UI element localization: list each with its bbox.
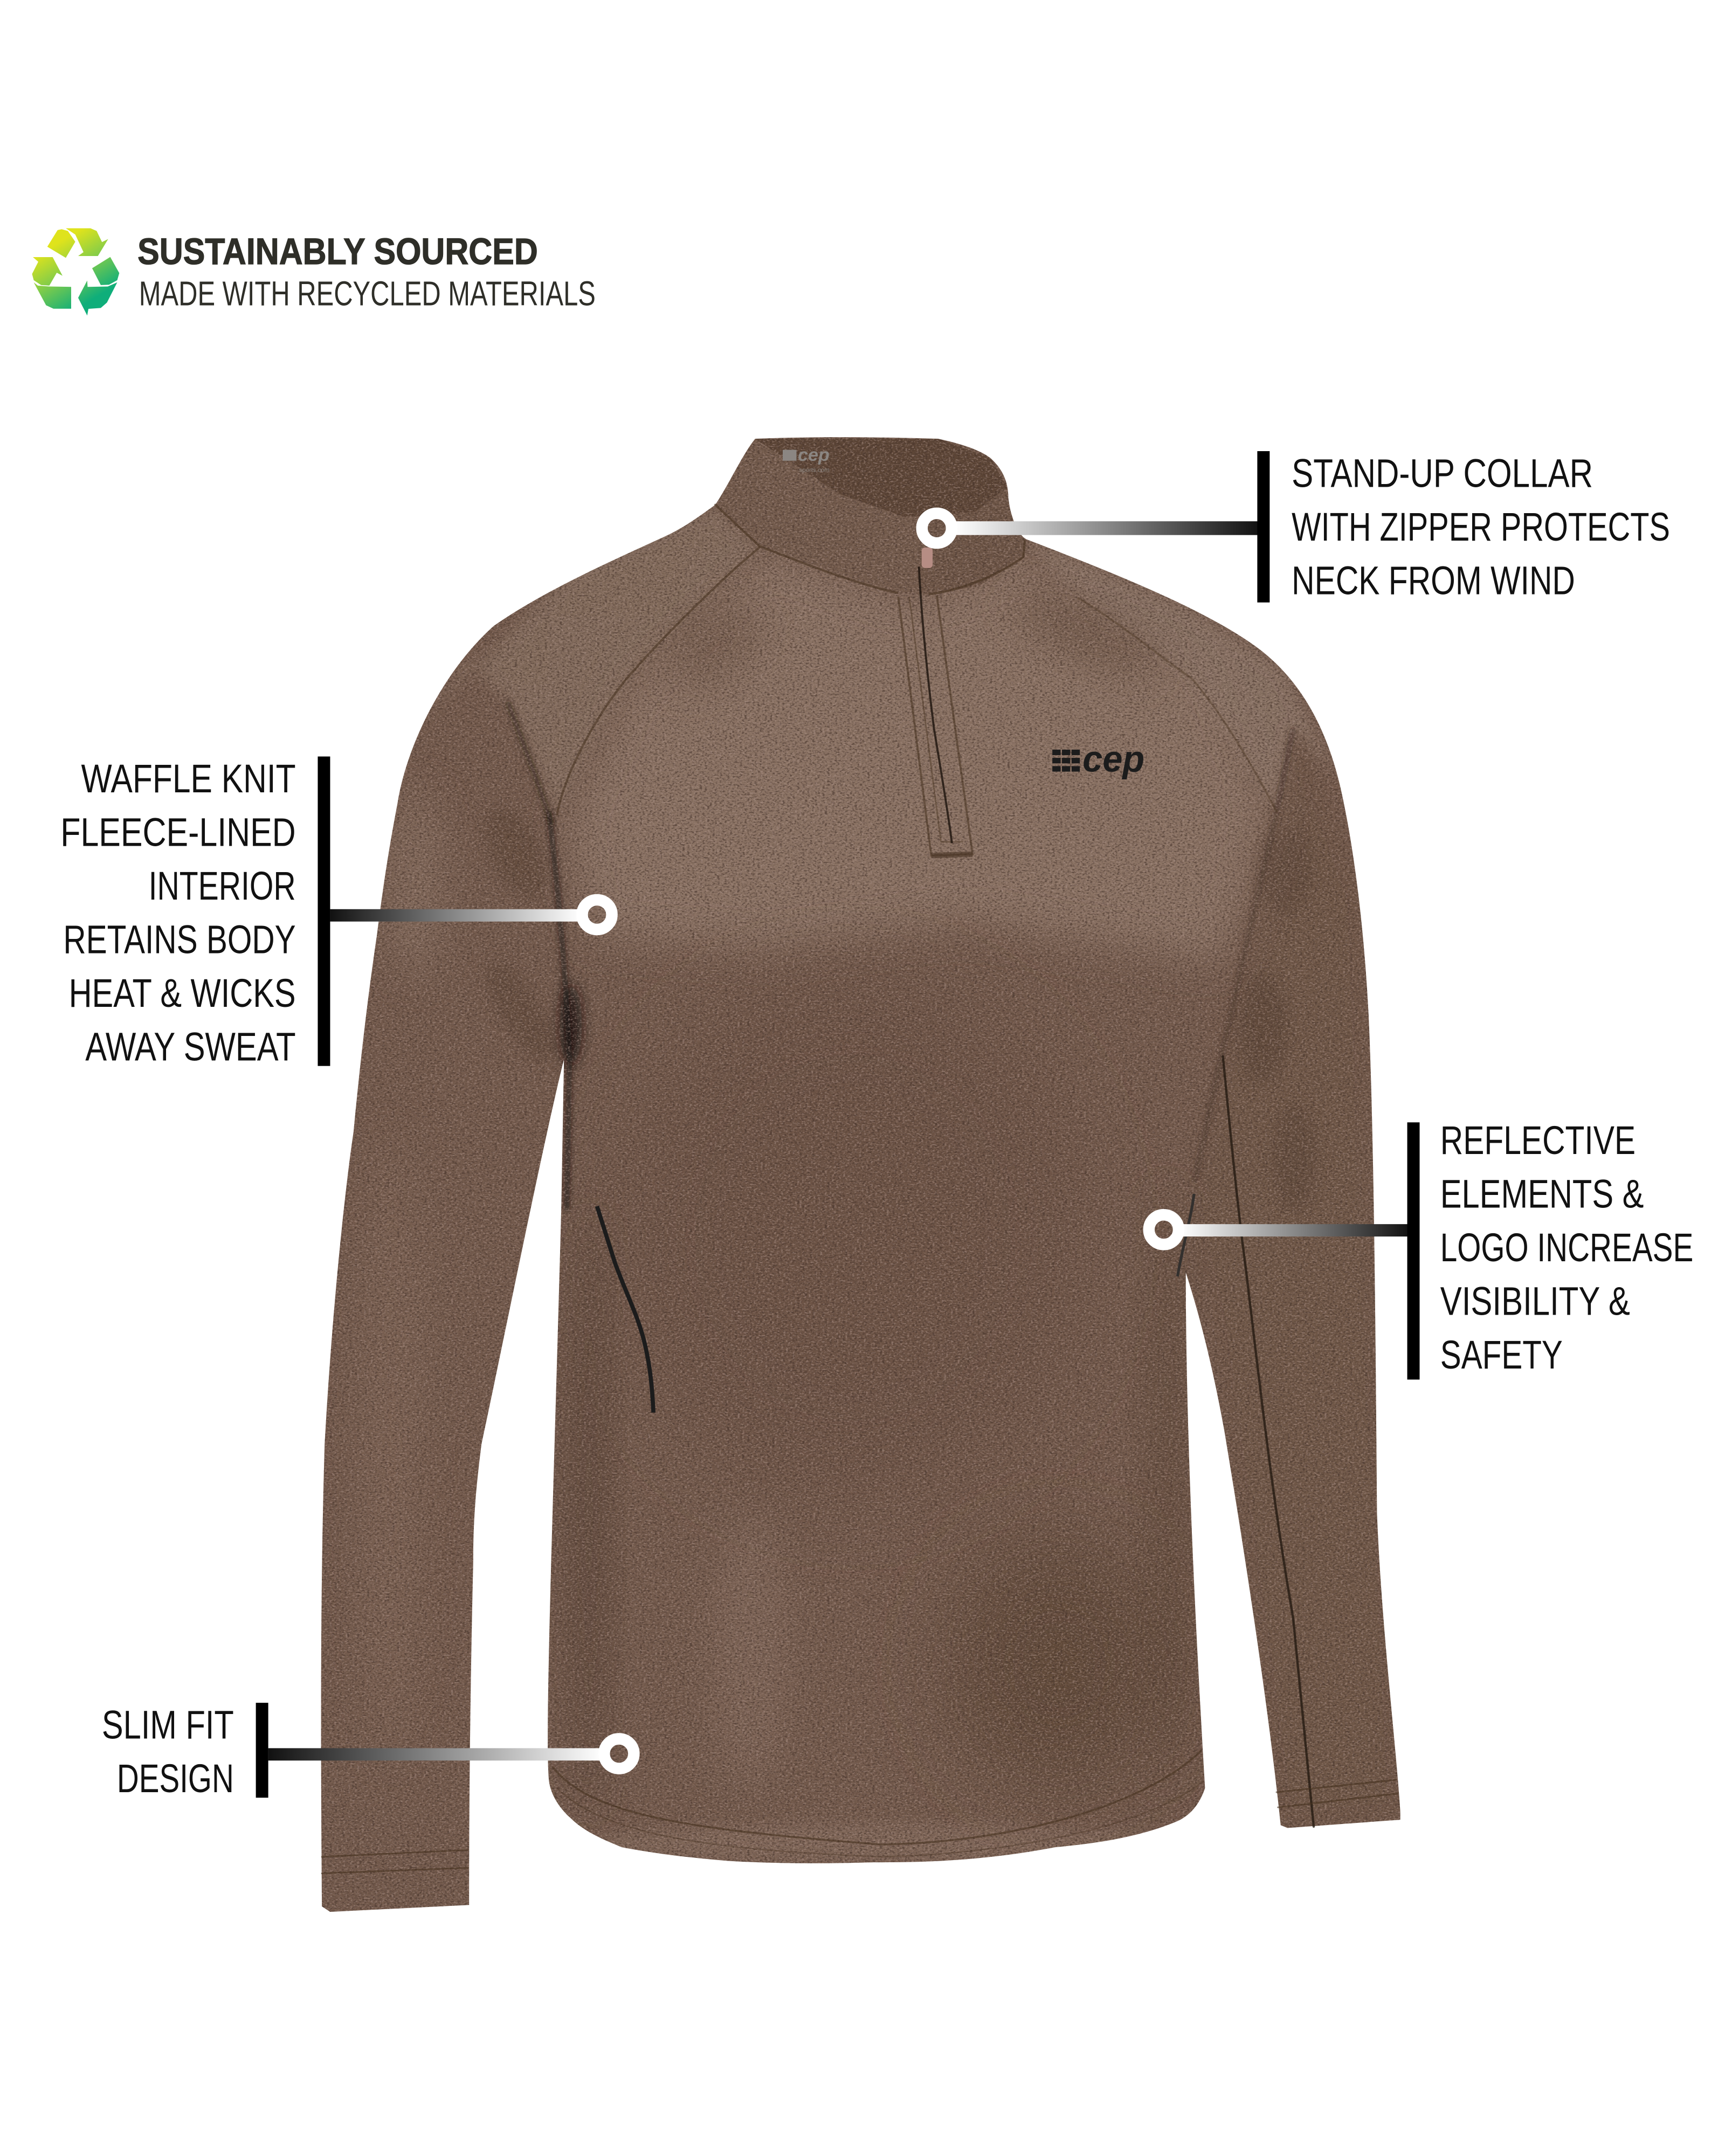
neck label logo: sports.com <box>799 467 830 473</box>
callout: slim fit design: DESIGN <box>117 1756 234 1801</box>
callout: slim fit design <box>102 1703 634 1801</box>
heading: sustainably sourced <box>137 231 596 313</box>
chest logo: cep <box>1082 738 1144 780</box>
callout: waffle knit fleece: FLEECE-LINED <box>60 810 296 854</box>
callout: waffle knit fleece <box>60 756 612 1069</box>
icon: recycling symbol <box>32 229 119 315</box>
callout: waffle knit fleece: HEAT & WICKS <box>69 971 296 1015</box>
soft shading on the garment <box>359 505 1403 1862</box>
callout: reflective elements: VISIBILITY & <box>1440 1279 1630 1324</box>
product photo: brown quarter-zip pullover <box>302 426 1417 1926</box>
reflective pocket line <box>597 1206 653 1413</box>
neck label logo <box>783 445 830 473</box>
chest logo <box>1052 738 1144 780</box>
callout: reflective elements: ELEMENTS & <box>1440 1172 1644 1217</box>
neck label logo: cep <box>798 445 830 465</box>
callout: stand-up collar: NECK FROM WIND <box>1292 558 1575 603</box>
callout: stand-up collar: STAND-UP COLLAR <box>1292 451 1593 495</box>
zipper placket <box>898 566 972 855</box>
collar front <box>715 439 1025 594</box>
callout: waffle knit fleece: WAFFLE KNIT <box>81 756 296 801</box>
callout: reflective elements: SAFETY <box>1440 1332 1563 1377</box>
heading: sustainably sourced: SUSTAINABLY SOURCED <box>137 231 538 272</box>
callout: waffle knit fleece: INTERIOR <box>149 863 296 908</box>
callout: slim fit design: SLIM FIT <box>102 1703 234 1747</box>
callout: waffle knit fleece: AWAY SWEAT <box>85 1024 296 1069</box>
heather fabric texture <box>302 426 1417 1926</box>
callout: reflective elements <box>1149 1118 1693 1379</box>
callout: waffle knit fleece: RETAINS BODY <box>63 917 296 962</box>
callout: reflective elements: REFLECTIVE <box>1440 1118 1636 1163</box>
seams <box>322 505 1398 1874</box>
zipper pull <box>922 548 933 568</box>
reflective side detail <box>1177 1194 1194 1276</box>
callout: stand-up collar <box>922 451 1670 603</box>
heading: sustainably sourced: MADE WITH RECYCLED MATERIALS <box>139 274 596 313</box>
inner back of collar <box>755 439 1007 517</box>
